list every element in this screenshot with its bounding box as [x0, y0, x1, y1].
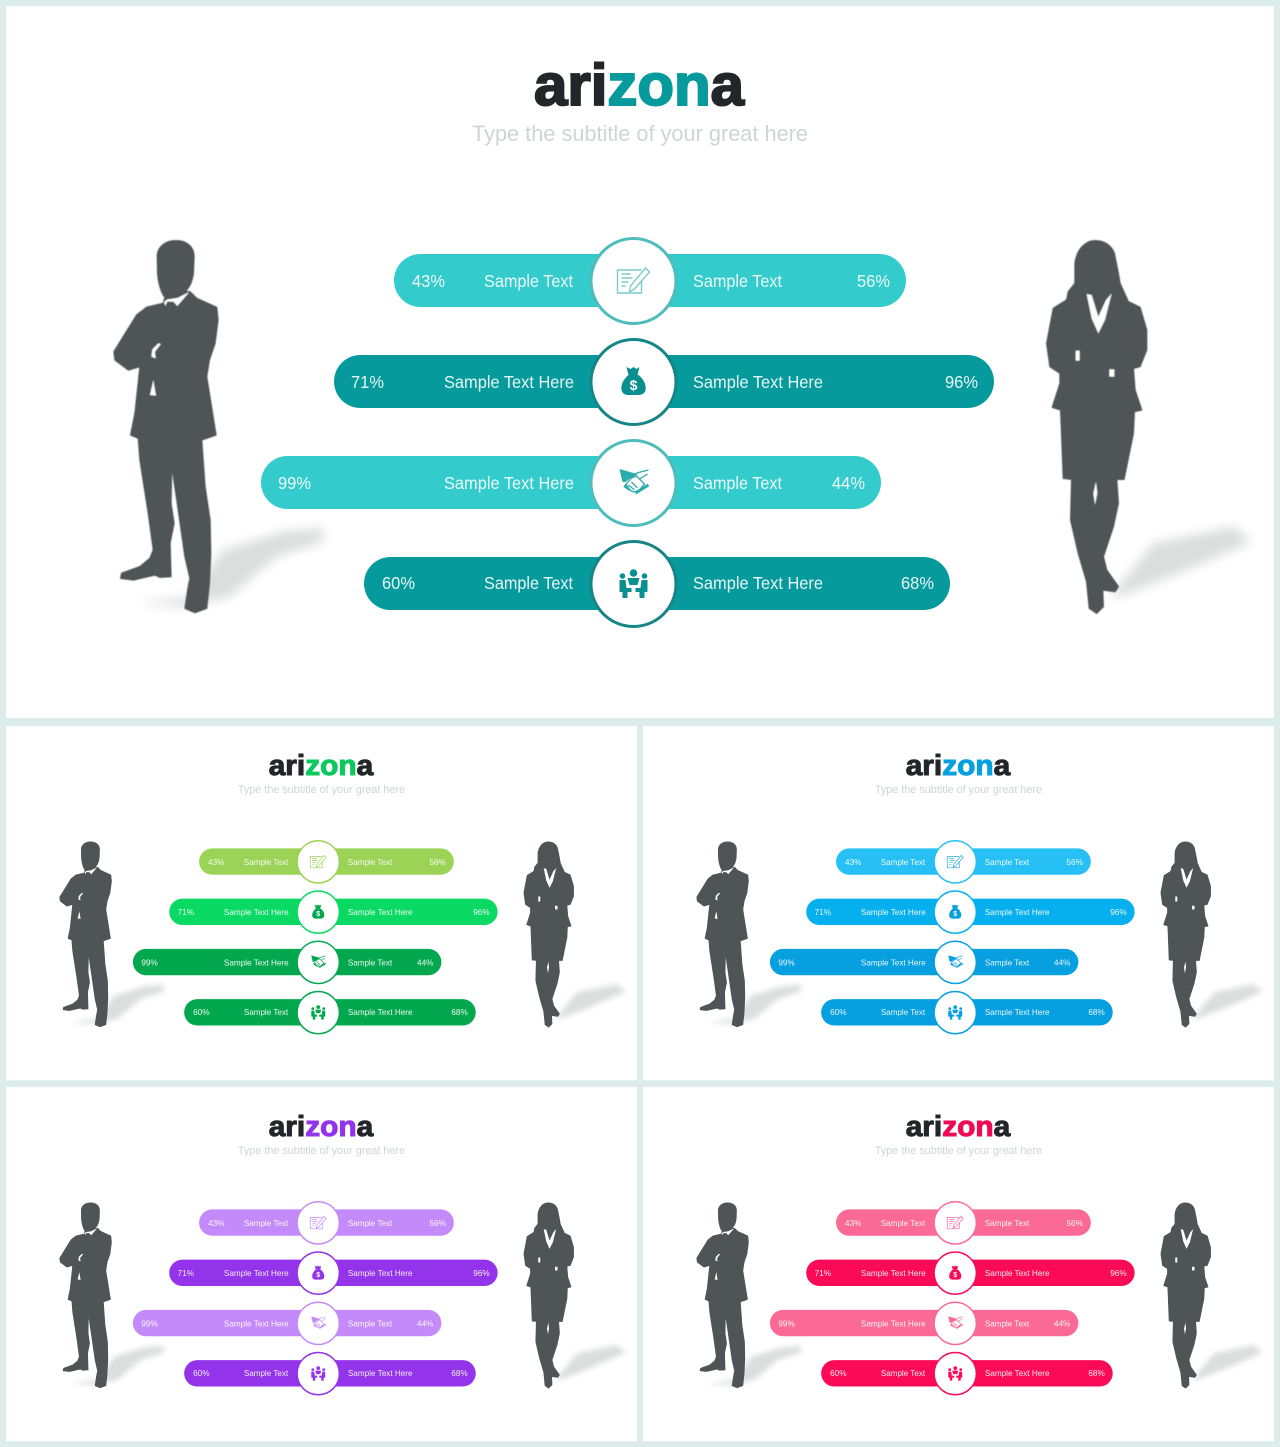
row 4: 60% / 68% [821, 1352, 1113, 1395]
row 4: 60% / 68%: 68% [451, 1007, 468, 1017]
row 4: 60% / 68%: Sample Text [881, 1007, 926, 1017]
row 2: 71% / 96%: Sample Text Here [224, 907, 289, 917]
row 1: 43% / 56%: 56% [1066, 1218, 1083, 1228]
row 2: 71% / 96%: 96% [945, 372, 978, 392]
title: arizona [269, 1111, 374, 1143]
silhouette: man [60, 842, 164, 1027]
row 1: 43% / 56%: Sample Text [881, 857, 926, 867]
row 4: 60% / 68%: Sample Text Here [985, 1007, 1050, 1017]
icon: handshake [948, 955, 963, 967]
row 1: 43% / 56%: 43% [845, 857, 862, 867]
row 4: 60% / 68%: 60% [193, 1368, 210, 1378]
row 2: 71% / 96% [806, 1252, 1135, 1294]
row 4: 60% / 68%: Sample Text [244, 1368, 289, 1378]
row 4: 60% / 68% [184, 991, 476, 1034]
row 2: 71% / 96%: 71% [351, 372, 384, 392]
row 1: 43% / 56%: Sample Text [244, 1218, 289, 1228]
row 1: 43% / 56%: 43% [412, 271, 445, 291]
row 2: 71% / 96%: 71% [815, 907, 831, 917]
row 4: 60% / 68%: 60% [382, 573, 415, 593]
row 1: 43% / 56% [199, 841, 454, 883]
row 2: 71% / 96% [169, 1252, 498, 1294]
icon: notepad and pen [947, 1216, 963, 1229]
row 1: 43% / 56% [394, 238, 906, 324]
row 3: 99% / 44%: 44% [417, 957, 434, 967]
icon: money bag [312, 1266, 324, 1280]
icon: team meeting [620, 569, 648, 598]
icon: money bag [949, 905, 961, 919]
row 3: 99% / 44%: Sample Text Here [861, 1318, 926, 1328]
row 3: 99% / 44% [133, 941, 441, 984]
panel: purple slide [6, 1087, 637, 1441]
row 2: 71% / 96%: Sample Text Here [985, 1268, 1050, 1278]
silhouette: man [697, 842, 801, 1027]
row 3: 99% / 44% [770, 941, 1078, 984]
row 3: 99% / 44% [770, 1302, 1078, 1345]
row 1: 43% / 56%: 56% [857, 271, 890, 291]
row 2: 71% / 96%: Sample Text Here [861, 907, 926, 917]
icon: handshake [311, 955, 326, 967]
subtitle: Type the subtitle of your great here [875, 1145, 1042, 1157]
row 3: 99% / 44%: Sample Text Here [444, 473, 574, 493]
row 3: 99% / 44%: Sample Text Here [224, 957, 289, 967]
subtitle: Type the subtitle of your great here [238, 1145, 405, 1157]
row 4: 60% / 68% [364, 542, 950, 626]
silhouette: man [60, 1203, 164, 1388]
icon: money bag [312, 905, 324, 919]
silhouette: woman [1161, 1203, 1263, 1388]
row 1: 43% / 56%: 43% [845, 1218, 862, 1228]
icon: notepad and pen [947, 855, 963, 868]
row 1: 43% / 56%: 56% [429, 857, 446, 867]
row 3: 99% / 44%: 99% [141, 1318, 158, 1328]
row 1: 43% / 56%: Sample Text [484, 271, 573, 291]
icon: money bag [949, 1266, 961, 1280]
row 4: 60% / 68%: Sample Text [244, 1007, 289, 1017]
subtitle: Type the subtitle of your great here [238, 784, 405, 796]
row 2: 71% / 96%: 96% [473, 1268, 490, 1278]
silhouette: woman [1047, 241, 1252, 613]
row 2: 71% / 96%: Sample Text Here [348, 1268, 413, 1278]
row 1: 43% / 56% [199, 1202, 454, 1244]
row 4: 60% / 68% [184, 1352, 476, 1395]
row 1: 43% / 56%: 43% [208, 857, 225, 867]
silhouette: woman [524, 842, 626, 1027]
row 1: 43% / 56%: Sample Text [348, 857, 393, 867]
row 2: 71% / 96%: 96% [473, 907, 490, 917]
row 1: 43% / 56%: Sample Text [881, 1218, 926, 1228]
row 3: 99% / 44%: Sample Text [985, 1318, 1030, 1328]
row 4: 60% / 68%: 68% [1088, 1368, 1105, 1378]
row 1: 43% / 56%: 43% [208, 1218, 225, 1228]
silhouette: man [697, 1203, 801, 1388]
icon: notepad and pen [310, 1216, 326, 1229]
icon: notepad and pen [618, 268, 650, 293]
icon: team meeting [948, 1366, 962, 1381]
row 2: 71% / 96%: 96% [1110, 1268, 1127, 1278]
icon: handshake [948, 1316, 963, 1328]
row 4: 60% / 68%: Sample Text [881, 1368, 926, 1378]
row 2: 71% / 96%: 71% [178, 907, 194, 917]
title: arizona [534, 53, 745, 118]
row 3: 99% / 44%: 99% [141, 957, 158, 967]
icon: money bag [621, 367, 646, 395]
silhouette: woman [1161, 842, 1263, 1027]
panel: main teal slide [6, 6, 1274, 718]
row 2: 71% / 96% [334, 340, 994, 424]
panel: blue slide [643, 726, 1274, 1080]
title: arizona [906, 1111, 1011, 1143]
icon: team meeting [311, 1366, 325, 1381]
subtitle: Type the subtitle of your great here [875, 784, 1042, 796]
row 2: 71% / 96%: 71% [815, 1268, 831, 1278]
row 4: 60% / 68%: 68% [901, 573, 934, 593]
row 3: 99% / 44% [261, 440, 881, 526]
row 1: 43% / 56%: 56% [429, 1218, 446, 1228]
icon: handshake [620, 469, 648, 493]
row 4: 60% / 68%: 68% [451, 1368, 468, 1378]
title: arizona [269, 750, 374, 782]
row 4: 60% / 68%: 60% [830, 1007, 847, 1017]
row 3: 99% / 44%: 99% [278, 473, 311, 493]
row 2: 71% / 96%: 96% [1110, 907, 1127, 917]
row 3: 99% / 44% [133, 1302, 441, 1345]
row 4: 60% / 68%: 60% [830, 1368, 847, 1378]
row 1: 43% / 56%: 56% [1066, 857, 1083, 867]
row 3: 99% / 44%: 44% [1054, 1318, 1071, 1328]
row 4: 60% / 68%: Sample Text Here [348, 1368, 413, 1378]
row 4: 60% / 68%: 60% [193, 1007, 210, 1017]
row 2: 71% / 96%: Sample Text Here [985, 907, 1050, 917]
row 3: 99% / 44%: Sample Text [985, 957, 1030, 967]
row 2: 71% / 96%: Sample Text Here [348, 907, 413, 917]
icon: handshake [311, 1316, 326, 1328]
title: arizona [906, 750, 1011, 782]
panel: pink slide [643, 1087, 1274, 1441]
row 3: 99% / 44%: Sample Text [348, 957, 393, 967]
row 1: 43% / 56%: Sample Text [985, 857, 1030, 867]
subtitle: Type the subtitle of your great here [472, 121, 808, 146]
row 1: 43% / 56%: Sample Text [244, 857, 289, 867]
row 3: 99% / 44%: 44% [417, 1318, 434, 1328]
silhouette: woman [524, 1203, 626, 1388]
row 2: 71% / 96%: Sample Text Here [861, 1268, 926, 1278]
row 3: 99% / 44%: Sample Text [348, 1318, 393, 1328]
row 3: 99% / 44%: 99% [778, 1318, 795, 1328]
row 1: 43% / 56%: Sample Text [348, 1218, 393, 1228]
row 3: 99% / 44%: Sample Text Here [861, 957, 926, 967]
row 4: 60% / 68%: Sample Text Here [693, 573, 823, 593]
row 1: 43% / 56% [836, 1202, 1091, 1244]
row 1: 43% / 56%: Sample Text [693, 271, 782, 291]
row 2: 71% / 96%: 71% [178, 1268, 194, 1278]
row 1: 43% / 56%: Sample Text [985, 1218, 1030, 1228]
row 2: 71% / 96%: Sample Text Here [224, 1268, 289, 1278]
row 3: 99% / 44%: 99% [778, 957, 795, 967]
row 4: 60% / 68%: Sample Text Here [348, 1007, 413, 1017]
icon: team meeting [311, 1005, 325, 1020]
row 4: 60% / 68%: Sample Text [484, 573, 573, 593]
row 3: 99% / 44%: 44% [832, 473, 865, 493]
row 4: 60% / 68% [821, 991, 1113, 1034]
row 3: 99% / 44%: 44% [1054, 957, 1071, 967]
row 2: 71% / 96%: Sample Text Here [693, 372, 823, 392]
row 1: 43% / 56% [836, 841, 1091, 883]
silhouette: man [114, 241, 323, 613]
row 4: 60% / 68%: Sample Text Here [985, 1368, 1050, 1378]
row 3: 99% / 44%: Sample Text Here [224, 1318, 289, 1328]
row 2: 71% / 96% [806, 891, 1135, 933]
panel: green slide [6, 726, 637, 1080]
icon: team meeting [948, 1005, 962, 1020]
row 2: 71% / 96%: Sample Text Here [444, 372, 574, 392]
row 2: 71% / 96% [169, 891, 498, 933]
row 4: 60% / 68%: 68% [1088, 1007, 1105, 1017]
row 3: 99% / 44%: Sample Text [693, 473, 782, 493]
icon: notepad and pen [310, 855, 326, 868]
